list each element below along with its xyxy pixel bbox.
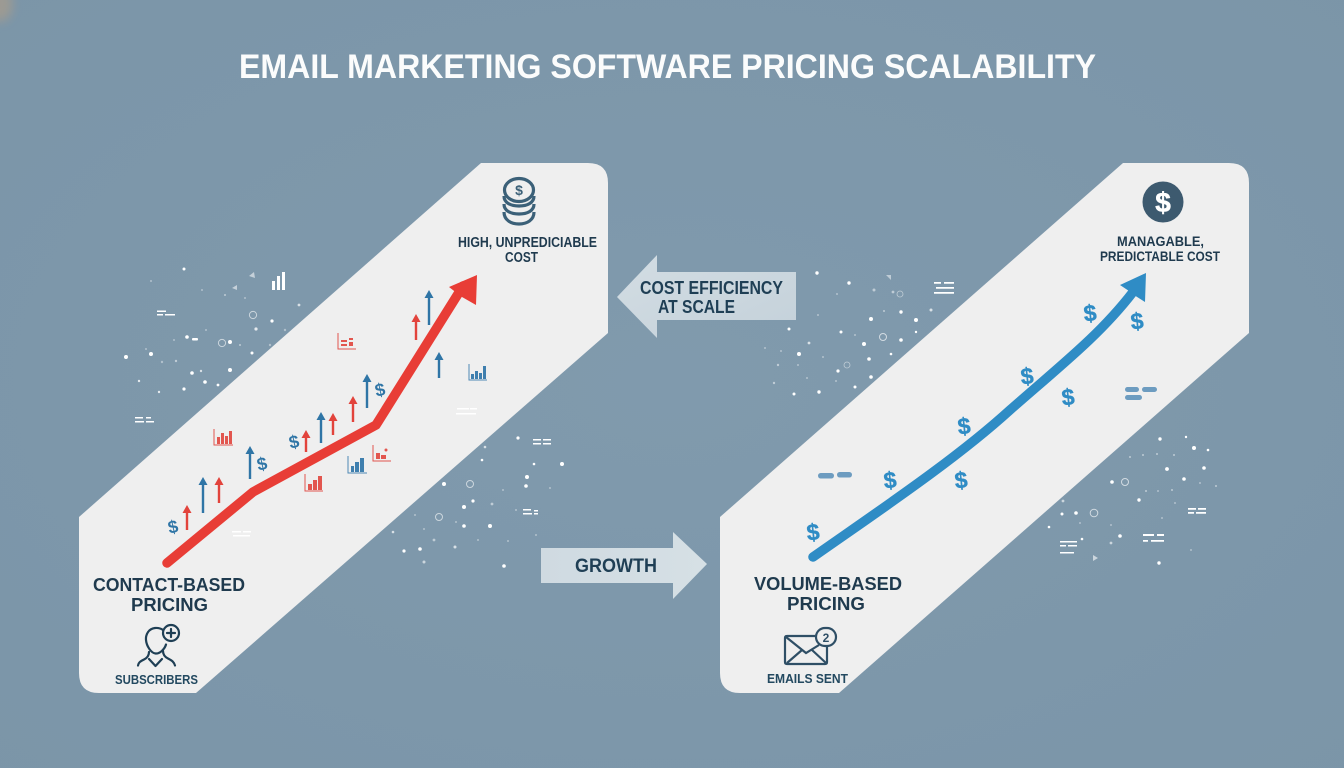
dollar signs: $	[805, 518, 821, 546]
red cost line with arrow	[167, 275, 477, 563]
icon: coin stack	[504, 178, 534, 224]
dollar signs: $	[1019, 362, 1035, 390]
small chart icons	[214, 333, 487, 491]
dollar signs: $	[255, 453, 269, 475]
small growth arrows	[182, 290, 444, 530]
dollar signs: $	[287, 431, 301, 453]
arrow: growth	[541, 532, 707, 599]
particle cluster: lower right	[1048, 436, 1217, 565]
panel: volume-based pricing	[720, 163, 1249, 693]
cost label	[1100, 233, 1220, 264]
cost label: HIGH, UNPREDICIABLE	[458, 235, 597, 251]
cost label: MANAGABLE,	[1117, 233, 1204, 249]
particle cluster: lower middle	[392, 436, 564, 568]
panel: contact-based pricing	[79, 163, 608, 693]
dollar signs: $	[882, 466, 898, 494]
icon: dollar circle	[1142, 182, 1184, 222]
arrow: growth: GROWTH	[575, 556, 657, 577]
dollar signs: $	[1060, 383, 1076, 411]
dollar signs: $	[1082, 299, 1098, 327]
cost label: PREDICTABLE COST	[1100, 248, 1220, 264]
heading: volume-based pricing	[754, 573, 902, 614]
panel background	[79, 163, 608, 693]
label: emails sent: EMAILS SENT	[767, 672, 848, 686]
cost label: COST	[505, 250, 538, 266]
faint white dashes	[232, 408, 477, 536]
dollar signs: $	[166, 516, 180, 538]
heading: volume-based pricing: PRICING	[787, 593, 865, 614]
heading: contact-based pricing: PRICING	[131, 594, 208, 615]
title: EMAIL MARKETING SOFTWARE PRICING SCALABILITY	[239, 48, 1096, 86]
arrow: cost efficiency at scale: COST EFFICIENCY	[640, 277, 784, 298]
particle cluster: upper left	[124, 268, 300, 422]
label: subscribers: SUBSCRIBERS	[115, 673, 198, 687]
arrow: cost efficiency at scale	[617, 255, 796, 338]
dollar signs: $	[953, 466, 969, 494]
cost label	[458, 235, 597, 266]
icon: dollar circle: $	[1155, 187, 1171, 218]
icon: envelope with badge: 2	[823, 631, 830, 645]
dash markers	[818, 387, 1157, 478]
arrow: cost efficiency at scale: AT SCALE	[658, 296, 735, 317]
icon: subscriber with plus	[138, 625, 179, 666]
blue cost line with arrow	[813, 273, 1146, 557]
heading: contact-based pricing: CONTACT-BASED	[93, 574, 245, 595]
icon: coin stack: $	[515, 182, 523, 198]
particle cluster: upper right	[764, 271, 954, 396]
heading: contact-based pricing	[93, 574, 245, 615]
panel background	[720, 163, 1249, 693]
icon: envelope with badge	[785, 628, 836, 664]
dollar signs: $	[373, 379, 387, 401]
dollar signs: $	[1129, 307, 1145, 335]
heading: volume-based pricing: VOLUME-BASED	[754, 573, 902, 594]
dollar signs	[805, 299, 1145, 546]
dollar signs	[166, 379, 387, 538]
dollar signs: $	[956, 412, 972, 440]
